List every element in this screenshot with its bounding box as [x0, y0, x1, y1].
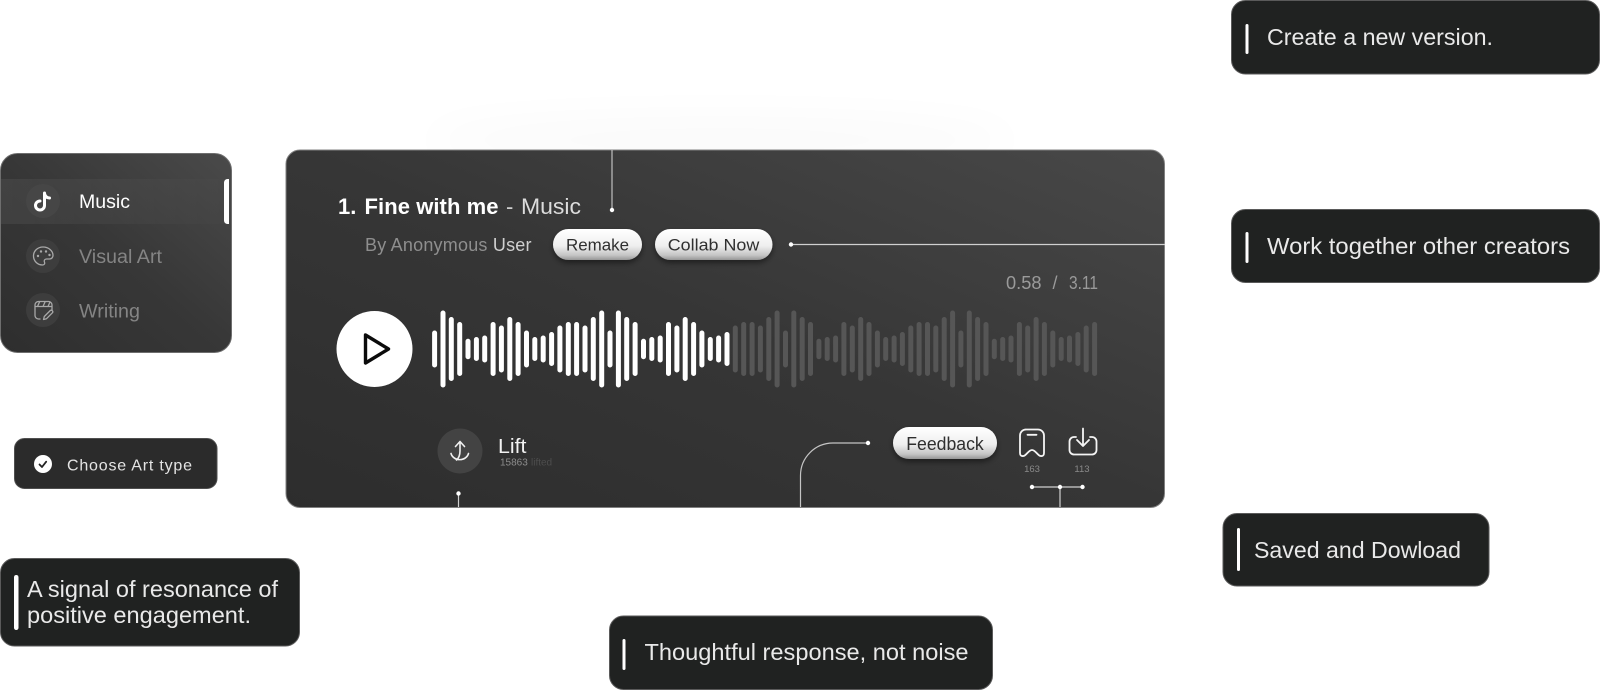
callout: saved and download: Saved and Dowload [1254, 537, 1461, 563]
time counter: / [1052, 273, 1058, 293]
lift control: lifted [531, 458, 552, 468]
callout: signal of resonance: positive engagement. [27, 602, 251, 628]
callout: saved and download [1223, 514, 1489, 586]
menu item: Writing [26, 293, 140, 327]
icon: download with count [1070, 428, 1096, 475]
menu item: Visual Art [26, 239, 163, 273]
callout: thoughtful response [610, 616, 992, 690]
lift control: Lift [498, 435, 527, 458]
callout: work together: Work together other creators [1267, 233, 1570, 259]
menu item: Writing: Writing [79, 302, 140, 322]
label: Choose Art type [14, 438, 217, 488]
time counter: 3.11 [1069, 273, 1098, 293]
author line: By Anonymous User [365, 235, 532, 255]
panel: art type menu [0, 154, 232, 352]
callout: signal of resonance [0, 558, 300, 646]
waveform: played portion [435, 313, 727, 385]
button: Remake [553, 229, 642, 260]
connector: saved and download [1030, 485, 1085, 507]
selected row highlight [1, 179, 231, 224]
callout: signal of resonance: A signal of resonance of [27, 576, 279, 602]
connector: collab [789, 242, 1165, 247]
panel: music player card [286, 150, 1165, 508]
connector: lift [456, 491, 461, 507]
waveform: remaining portion [735, 313, 1095, 385]
selected row handle [224, 179, 229, 224]
track title: - [506, 194, 513, 219]
track title: 1. [338, 194, 356, 219]
callout: create a new version [1232, 0, 1600, 74]
icon: bookmark with count: 163 [1024, 464, 1040, 475]
menu item: Visual Art: Visual Art [79, 247, 163, 268]
icon: check circle [34, 455, 52, 473]
label: Choose Art type: Choose Art type [67, 458, 192, 474]
track title: Music [521, 194, 581, 219]
button: Feedback: Feedback [906, 434, 985, 454]
button: Collab Now: Collab Now [668, 236, 760, 254]
button: Remake: Remake [566, 236, 629, 254]
time counter: 0.58 [1006, 273, 1042, 293]
play button [336, 311, 412, 387]
track title: Fine with me [364, 194, 498, 219]
lift control [438, 428, 552, 474]
callout: thoughtful response: Thoughtful response, not noise [644, 639, 968, 665]
soft shadow above main panel [420, 116, 1020, 164]
connector: remake [610, 150, 614, 212]
icon: bookmark with count [1020, 430, 1044, 475]
connector: feedback [800, 441, 870, 507]
callout: work together [1232, 210, 1600, 282]
button: Feedback [893, 427, 997, 459]
icon: download with count: 113 [1074, 464, 1090, 475]
menu item: Music: Music [79, 192, 130, 213]
menu item: Music [26, 184, 130, 218]
button: Collab Now [655, 229, 772, 260]
callout: create a new version: Create a new version. [1267, 24, 1493, 50]
lift control: 15863 [500, 458, 528, 468]
